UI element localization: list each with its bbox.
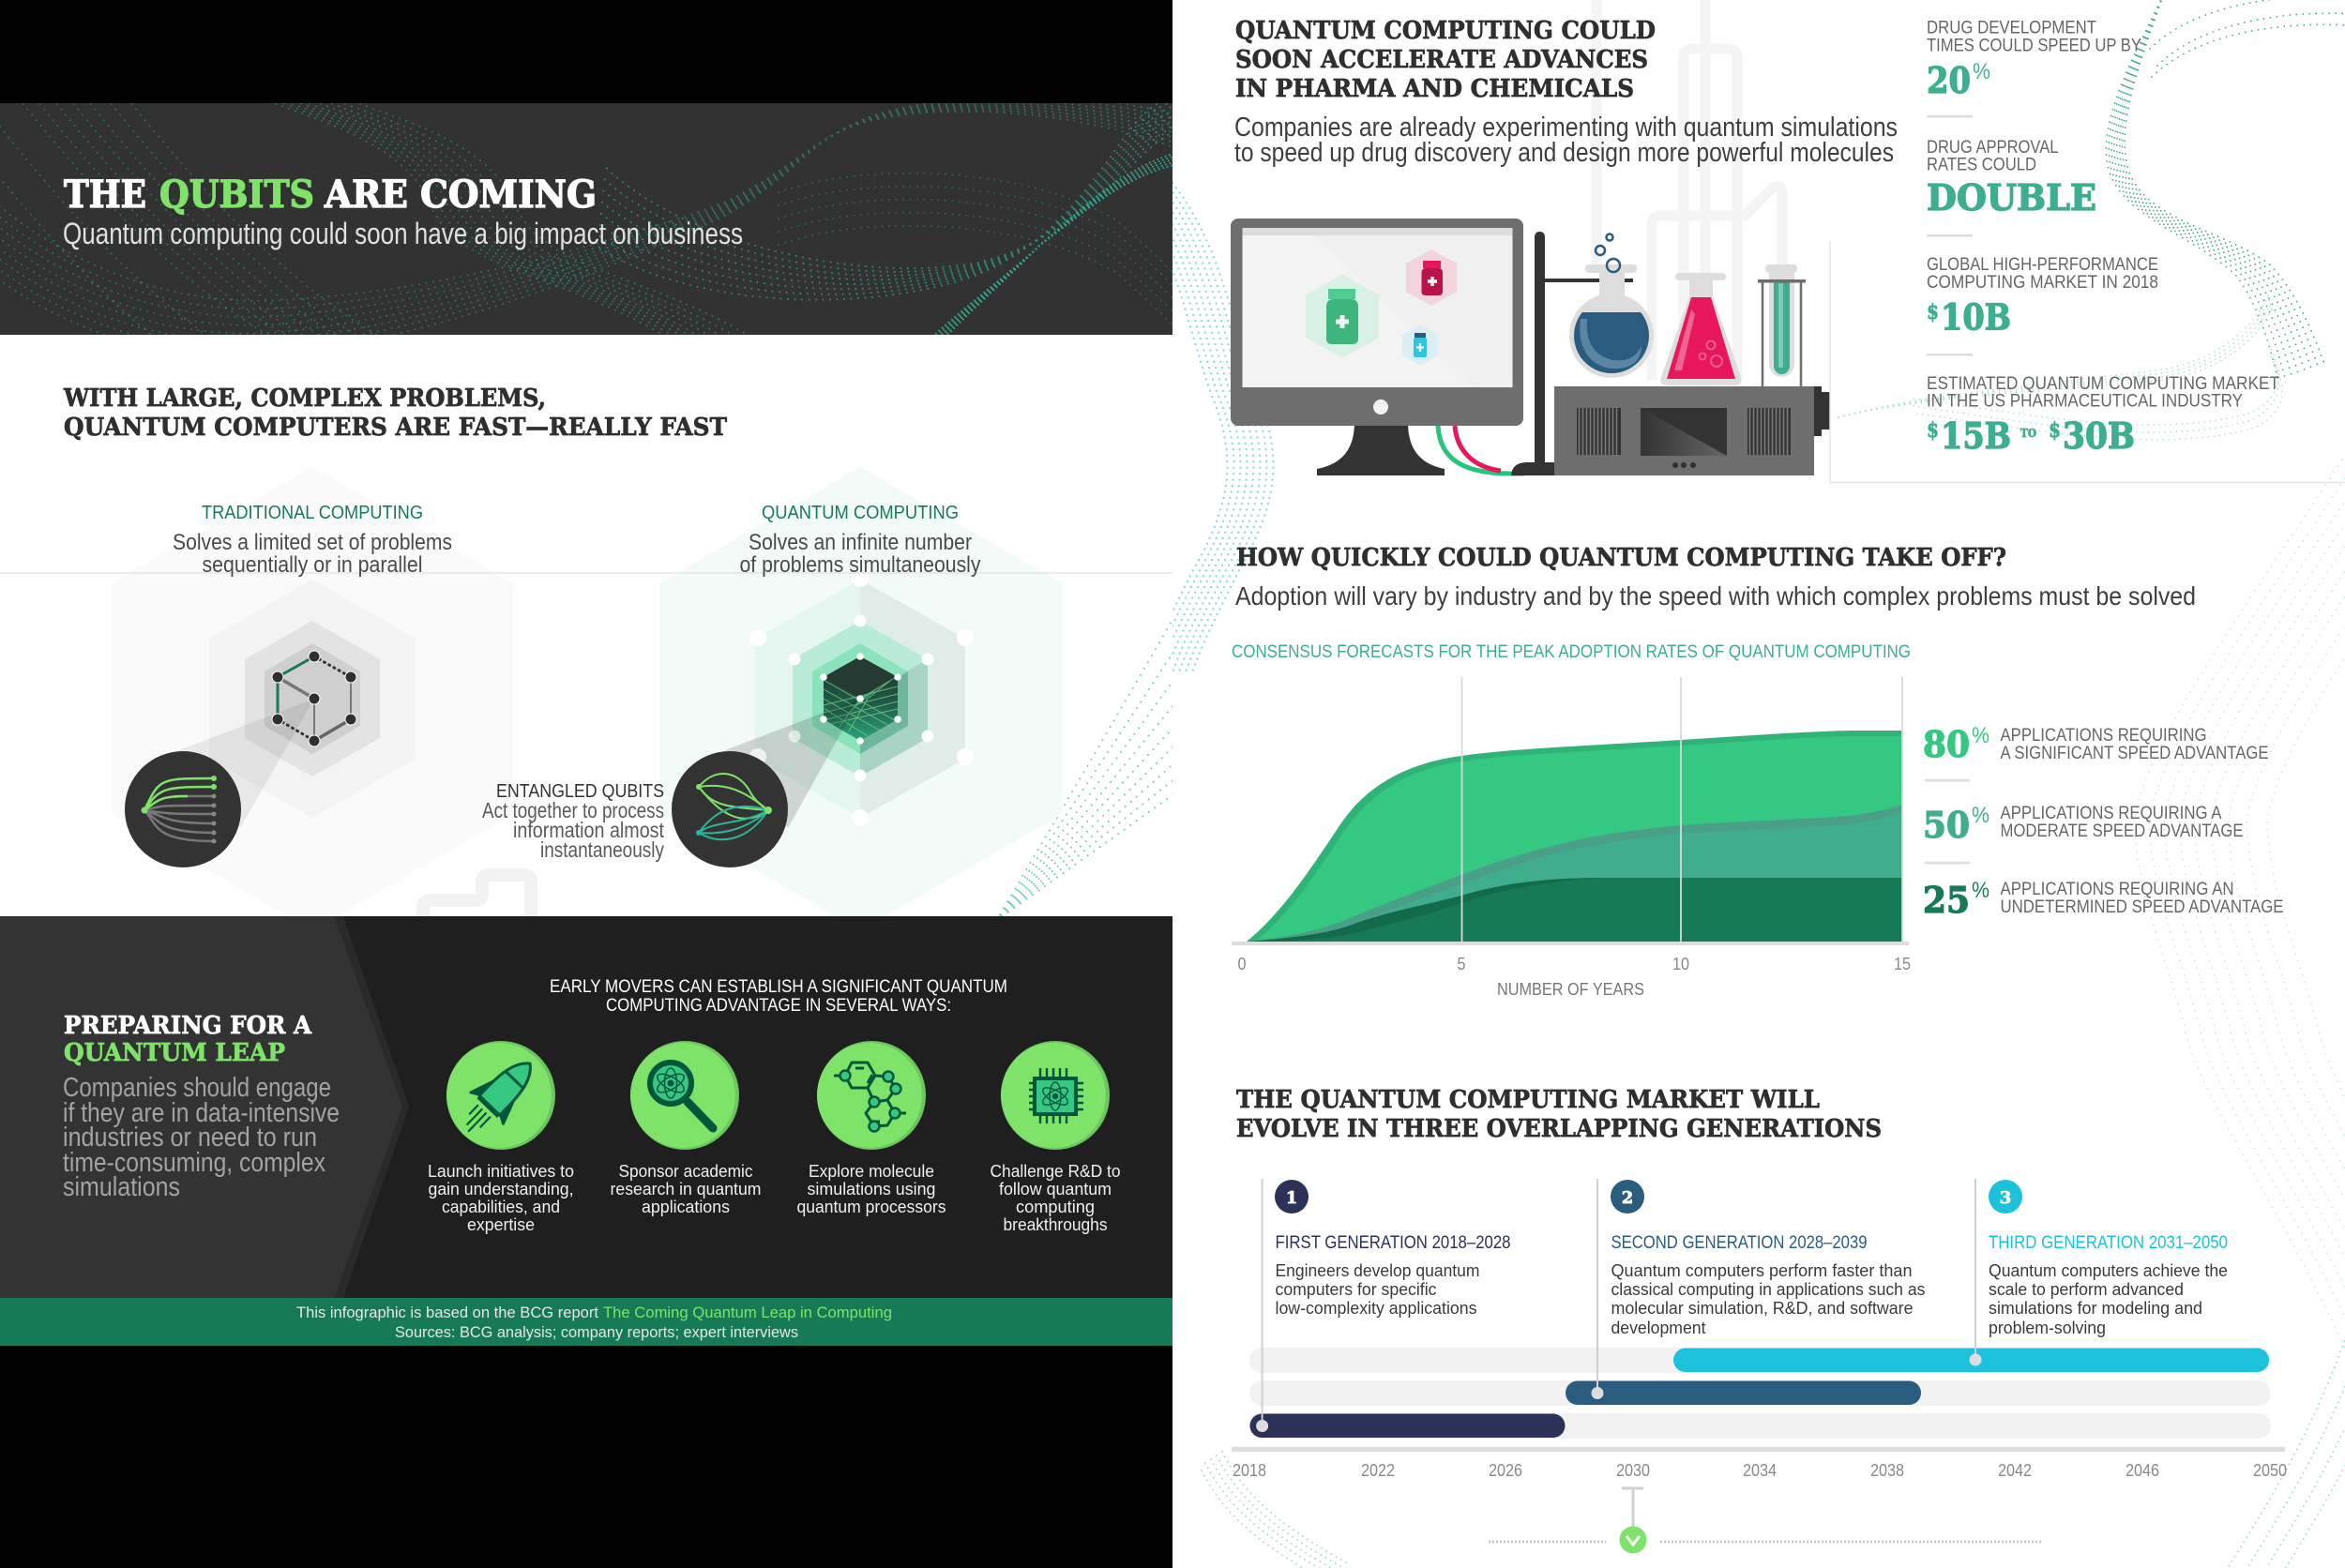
legend: 50 percent: MODERATE SPEED ADVANTAGE [2000,822,2244,841]
timeline axis [1232,1447,2285,1452]
stat: quantum pharma market [1927,374,2279,457]
generation 1: Engineers develop quantum [1276,1260,1480,1280]
body text: Companies should engage [63,1073,331,1103]
generation 2: Quantum computers perform faster than [1611,1260,1912,1280]
caption: sponsor research [610,1162,762,1216]
icon: classical bit circuit [125,751,241,867]
intro heading: COMPUTING ADVANTAGE IN SEVERAL WAYS: [606,996,951,1016]
legend: 25 percent [1923,878,2283,921]
area chart: adoption curves [1232,677,1911,999]
stat: drug development: DRUG DEVELOPMENT [1927,19,2096,38]
heading [64,1012,312,1067]
caption: challenge R&D: breakthroughs [1004,1215,1107,1234]
timeline: generation bars [1232,1179,2287,1480]
year labels [1233,1461,2287,1480]
blue round flask [1569,234,1654,378]
icon: molecule [817,1041,926,1150]
body text: if they are in data-intensive [63,1098,340,1128]
stat: drug development [1927,19,2141,101]
text: entangled qubits: instantaneously [540,837,664,862]
body text: simulations [63,1172,180,1202]
area: 80 percent [1247,731,1902,942]
beam to qubit detail [179,699,314,828]
legend: 80 percent: A SIGNIFICANT SPEED ADVANTAGE [2000,744,2268,763]
year labels: 2026 [1489,1461,1522,1480]
generation 3: scale to perform advanced [1989,1279,2184,1299]
stat: HPC market: GLOBAL HIGH-PERFORMANCE [1927,255,2158,275]
caption: challenge R&D [991,1162,1120,1234]
legend: 50 percent [1923,803,2244,846]
caption: launch initiatives [428,1162,574,1234]
axis and gridlines [1232,677,1909,945]
x axis labels: 5 [1458,955,1465,973]
stat: drug approval: DRUG APPROVAL [1927,138,2058,158]
footer: sources [0,1298,1172,1346]
bar: first generation [1249,1414,1565,1438]
text: quantum computing [739,503,981,578]
legend: 50 percent: 50 [1923,804,1970,846]
generation 2: development [1611,1318,1705,1337]
subtitle: Quantum computing could soon have a big impact on business [63,217,743,250]
stat: quantum pharma market: ESTIMATED QUANTUM COMPUTING MARKET [1927,374,2279,394]
panel: quantum computing diagram [659,467,1063,930]
body text: industries or need to run [63,1123,317,1153]
intro heading: EARLY MOVERS CAN ESTABLISH A SIGNIFICANT QUANTUM [550,977,1007,997]
legend: 50 percent: APPLICATIONS REQUIRING A [2000,804,2222,823]
chart title: CONSENSUS FORECASTS FOR THE PEAK ADOPTION RATES OF QUANTUM COMPUTING [1232,642,1911,662]
area: 50 percent [1247,805,1902,942]
subheading: adoption: Adoption will vary by industry and by the speed with which complex problems must be solved [1235,581,2196,611]
stat: drug development: % [1973,59,1990,84]
generation 2: molecular simulation, R&D, and software [1611,1298,1914,1318]
stat: HPC market: $ [1927,300,1939,324]
icon: pink bottle [1406,249,1457,306]
stat: quantum pharma market: 30B [2063,415,2135,457]
bar: second generation [1566,1380,1921,1405]
year labels: 2022 [1361,1461,1395,1480]
section heading: fast computers: WITH LARGE, COMPLEX PROBLEMS, [63,384,546,413]
icon: rocket [446,1041,555,1150]
year labels: 2046 [2126,1461,2159,1480]
caption: explore simulations: quantum processors [797,1198,946,1216]
year labels: 2038 [1870,1461,1904,1480]
footer: sources: This infographic is based on the BCG report [296,1304,598,1321]
generation 2: 2 [1622,1188,1633,1208]
heading: three generations [1236,1086,1882,1143]
legend: 25 percent: 25 [1923,879,1970,921]
heading: pharma and chemicals: QUANTUM COMPUTING COULD [1235,17,1656,45]
text: quantum computing: QUANTUM COMPUTING [762,503,959,523]
section heading: fast computers [63,384,728,442]
year labels: 2042 [1998,1461,2032,1480]
legend: 80 percent: % [1972,723,1989,748]
generation 1: computers for specific [1276,1279,1437,1299]
beam to entangled qubits [725,699,860,828]
title: THE [64,173,146,217]
x axis title: NUMBER OF YEARS [1497,979,1644,999]
caption: launch initiatives: gain understanding, [428,1180,574,1199]
heading: pharma and chemicals [1235,17,1656,103]
generation 3 [1989,1180,2228,1337]
year labels: 2030 [1616,1461,1650,1480]
body text: time-consuming, complex [63,1148,325,1178]
year labels: 2018 [1233,1461,1266,1480]
stat: drug development: 20 [1927,59,1971,101]
text: traditional computing [173,503,452,578]
intro text: simulations: to speed up drug discovery and design more powerful molecules [1234,138,1894,168]
x axis labels: 10 [1672,955,1689,973]
caption: challenge R&D: follow quantum [999,1180,1112,1199]
generation 3: simulations for modeling and [1989,1298,2202,1318]
caption: explore simulations: Explore molecule [809,1162,934,1181]
year labels: 2034 [1743,1461,1777,1480]
text: quantum computing: of problems simultaneously [739,552,981,578]
title: QUBITS [159,173,314,217]
generation 1: 1 [1286,1188,1297,1208]
panel: traditional computing diagram [112,467,513,930]
stat: drug development: TIMES COULD SPEED UP BY [1927,36,2141,56]
generation 3: problem-solving [1989,1318,2106,1337]
intro heading [550,977,1007,1016]
year labels: 2050 [2253,1461,2287,1480]
text: entangled qubits [482,781,665,862]
generation 1: low-complexity applications [1276,1298,1476,1318]
area: 25 percent [1247,878,1902,942]
legend: 50 percent: % [1972,803,1989,828]
heading: PREPARING FOR A [64,1012,312,1040]
generation 2: classical computing in applications such as [1611,1279,1925,1299]
panel: preparing for a quantum leap [0,916,1172,1298]
heading: pharma and chemicals: SOON ACCELERATE ADVANCES [1235,46,1648,74]
legend: 80 percent: 80 [1923,723,1970,765]
icon: magnifier with atom [630,1041,739,1150]
stat: quantum pharma market: TO [2020,427,2036,440]
text: entangled qubits: ENTANGLED QUBITS [496,781,664,802]
caption: launch initiatives: capabilities, and [442,1198,560,1216]
caption: sponsor research: research in quantum [610,1180,762,1199]
intro text: simulations [1234,113,1898,168]
generation 1 [1275,1180,1510,1318]
caption: explore simulations [797,1162,946,1216]
stat: HPC market: 10B [1941,296,2011,338]
bar: third generation [1673,1349,2269,1372]
caption: explore simulations: simulations using [807,1180,936,1199]
stat: quantum pharma market: 15B [1941,415,2011,457]
icon: entangled cube [824,656,898,741]
stat: quantum pharma market: $ [2049,418,2061,443]
heading: three generations: EVOLVE IN THREE OVERLAPPING GENERATIONS [1236,1115,1882,1143]
text: entangled qubits: information almost [513,818,665,842]
pink conical flask [1660,273,1741,385]
icon: entangled qubits circuit [672,751,788,867]
intro text: simulations: Companies are already experimenting with quantum simulations [1234,113,1898,143]
caption: challenge R&D: computing [1016,1198,1095,1216]
header banner [0,103,1172,335]
footer: sources: The Coming Quantum Leap in Computing [603,1304,892,1321]
legend: 25 percent: APPLICATIONS REQUIRING AN [2000,880,2234,899]
x axis labels: 15 [1894,955,1911,973]
text: entangled qubits: Act together to process [482,798,664,822]
stat: drug approval: RATES COULD [1927,156,2036,174]
generation 1: FIRST GENERATION 2018–2028 [1276,1233,1510,1253]
lab stand [1511,232,1633,475]
icon: blue bottle [1402,324,1438,366]
title [64,173,597,217]
stat: drug approval: DOUBLE [1927,176,2096,219]
text: traditional computing: TRADITIONAL COMPUTING [202,503,423,523]
generation 2 [1611,1180,1925,1337]
legend: 25 percent: UNDETERMINED SPEED ADVANTAGE [2000,897,2283,917]
test tube [1758,264,1806,386]
marker: today connector [1489,1488,2042,1553]
stat: HPC market [1927,255,2158,338]
heading: pharma and chemicals: IN PHARMA AND CHEMICALS [1235,75,1634,103]
generation 2: SECOND GENERATION 2028–2039 [1611,1233,1867,1253]
x axis labels [1238,955,1911,973]
icon: classical cube of bits [272,651,356,746]
heading: QUANTUM LEAP [64,1039,285,1067]
legend: 80 percent [1923,723,2268,765]
title: ARE COMING [324,173,597,217]
heading: three generations: THE QUANTUM COMPUTING MARKET WILL [1236,1086,1820,1114]
caption: launch initiatives: expertise [467,1215,535,1234]
generation 3: THIRD GENERATION 2031–2050 [1989,1233,2228,1253]
generation 3: Quantum computers achieve the [1989,1260,2228,1280]
x axis labels: 0 [1238,955,1246,973]
text: traditional computing: Solves a limited set of problems [173,530,452,555]
stat: HPC market: COMPUTING MARKET IN 2018 [1927,273,2158,293]
stat: drug approval [1927,138,2096,219]
stat: quantum pharma market: $ [1927,418,1939,443]
analyzer machine [1554,386,1830,475]
monitor [1231,219,1523,475]
caption: launch initiatives: Launch initiatives to [428,1162,574,1181]
caption: sponsor research: Sponsor academic [619,1162,752,1181]
icon: quantum chip [1001,1041,1110,1150]
body text [63,1073,340,1202]
text: quantum computing: Solves an infinite number [749,530,972,555]
caption: sponsor research: applications [642,1198,730,1216]
text: traditional computing: sequentially or in parallel [203,552,422,578]
icon: green bottle [1306,274,1379,358]
section heading: fast computers: QUANTUM COMPUTERS ARE FAST—REALLY FAST [64,414,728,442]
illustration: computer and lab equipment [1231,219,1830,475]
generation 3: 3 [2000,1188,2011,1208]
legend: 80 percent: APPLICATIONS REQUIRING [2000,726,2206,746]
footer: sources: Sources: BCG analysis; company reports; expert interviews [395,1323,798,1341]
caption: challenge R&D: Challenge R&D to [991,1162,1120,1181]
heading: how quickly: HOW QUICKLY COULD QUANTUM COMPUTING TAKE OFF? [1236,544,2006,572]
stat: quantum pharma market: IN THE US PHARMACEUTICAL INDUSTRY [1927,392,2243,411]
legend: 25 percent: % [1972,878,1989,903]
